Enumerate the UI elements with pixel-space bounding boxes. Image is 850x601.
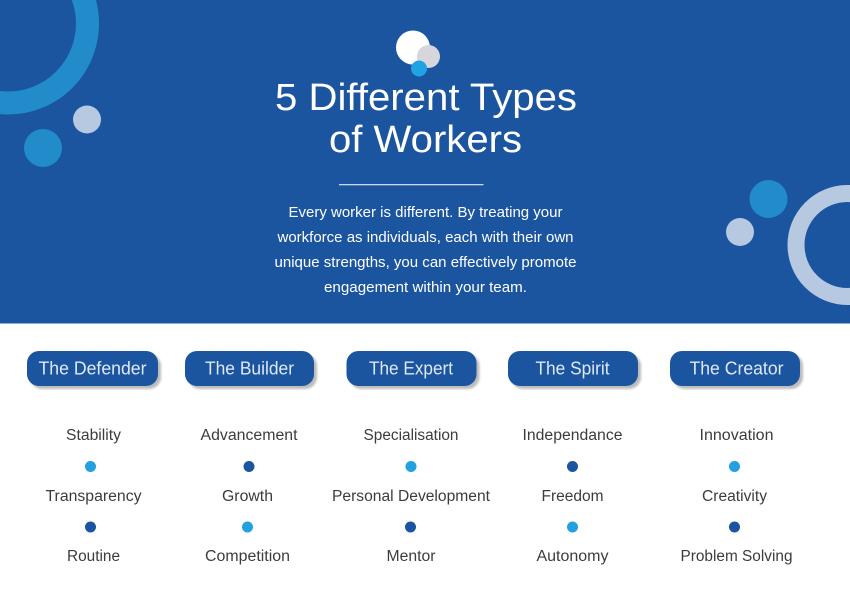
- intro text: workforce as individuals, each with their own: [276, 230, 574, 246]
- list: Defender traits: [46, 427, 142, 565]
- decoration: left blue circle: [24, 129, 62, 167]
- button: The Expert: The Expert: [369, 358, 453, 378]
- column: The Spirit: [508, 351, 641, 565]
- button: The Defender: [27, 351, 158, 386]
- intro text: [274, 205, 576, 296]
- button: The Creator: [670, 351, 800, 386]
- list: Spirit traits: Autonomy: [536, 548, 609, 565]
- list: Expert traits: Mentor: [386, 548, 436, 565]
- list: Creator traits: Problem Solving: [680, 548, 792, 565]
- column: The Defender: [27, 351, 161, 565]
- button: The Builder: The Builder: [205, 358, 294, 378]
- button: The Expert: [346, 351, 476, 386]
- list: Spirit traits: Freedom: [542, 488, 604, 505]
- intro text: engagement within your team.: [324, 280, 527, 296]
- title: [275, 77, 577, 161]
- list: Builder traits: Competition: [205, 548, 290, 565]
- column: The Creator: [670, 351, 803, 565]
- icon: overlapping circles: [396, 30, 440, 76]
- list: Creator traits: [680, 427, 792, 565]
- list: Spirit traits: Independance: [522, 427, 622, 444]
- decoration: left light circle: [73, 106, 101, 134]
- list: Builder traits: Advancement: [200, 427, 298, 444]
- button: The Builder: [185, 351, 314, 386]
- list: Creator traits: Creativity: [702, 488, 767, 505]
- button: The Spirit: The Spirit: [536, 358, 610, 378]
- list: Defender traits: Stability: [66, 427, 121, 444]
- decoration: top left ring: [0, 0, 88, 103]
- button: The Defender: The Defender: [38, 358, 146, 378]
- decoration: right ring: [796, 194, 850, 296]
- panel: header: [0, 0, 850, 324]
- column: The Builder: [185, 351, 317, 565]
- column: The Expert: [332, 351, 491, 565]
- list: Spirit traits: [522, 427, 622, 565]
- list: Defender traits: Transparency: [46, 488, 142, 505]
- list: Expert traits: [332, 427, 491, 565]
- list: Defender traits: Routine: [67, 548, 120, 565]
- button: The Creator: The Creator: [690, 358, 784, 378]
- title: of Workers: [329, 119, 522, 161]
- intro text: unique strengths, you can effectively promote: [274, 255, 576, 271]
- list: Expert traits: Specialisation: [364, 427, 458, 444]
- list: Builder traits: [200, 427, 298, 565]
- list: Builder traits: Growth: [222, 488, 273, 505]
- decoration: right light circle: [726, 218, 754, 246]
- title: 5 Different Types: [275, 77, 577, 119]
- button: The Spirit: [508, 351, 638, 386]
- decoration: right blue circle: [750, 180, 788, 218]
- list: Expert traits: Personal Development: [332, 488, 491, 505]
- intro text: Every worker is different. By treating your: [288, 205, 563, 221]
- list: Creator traits: Innovation: [700, 427, 774, 444]
